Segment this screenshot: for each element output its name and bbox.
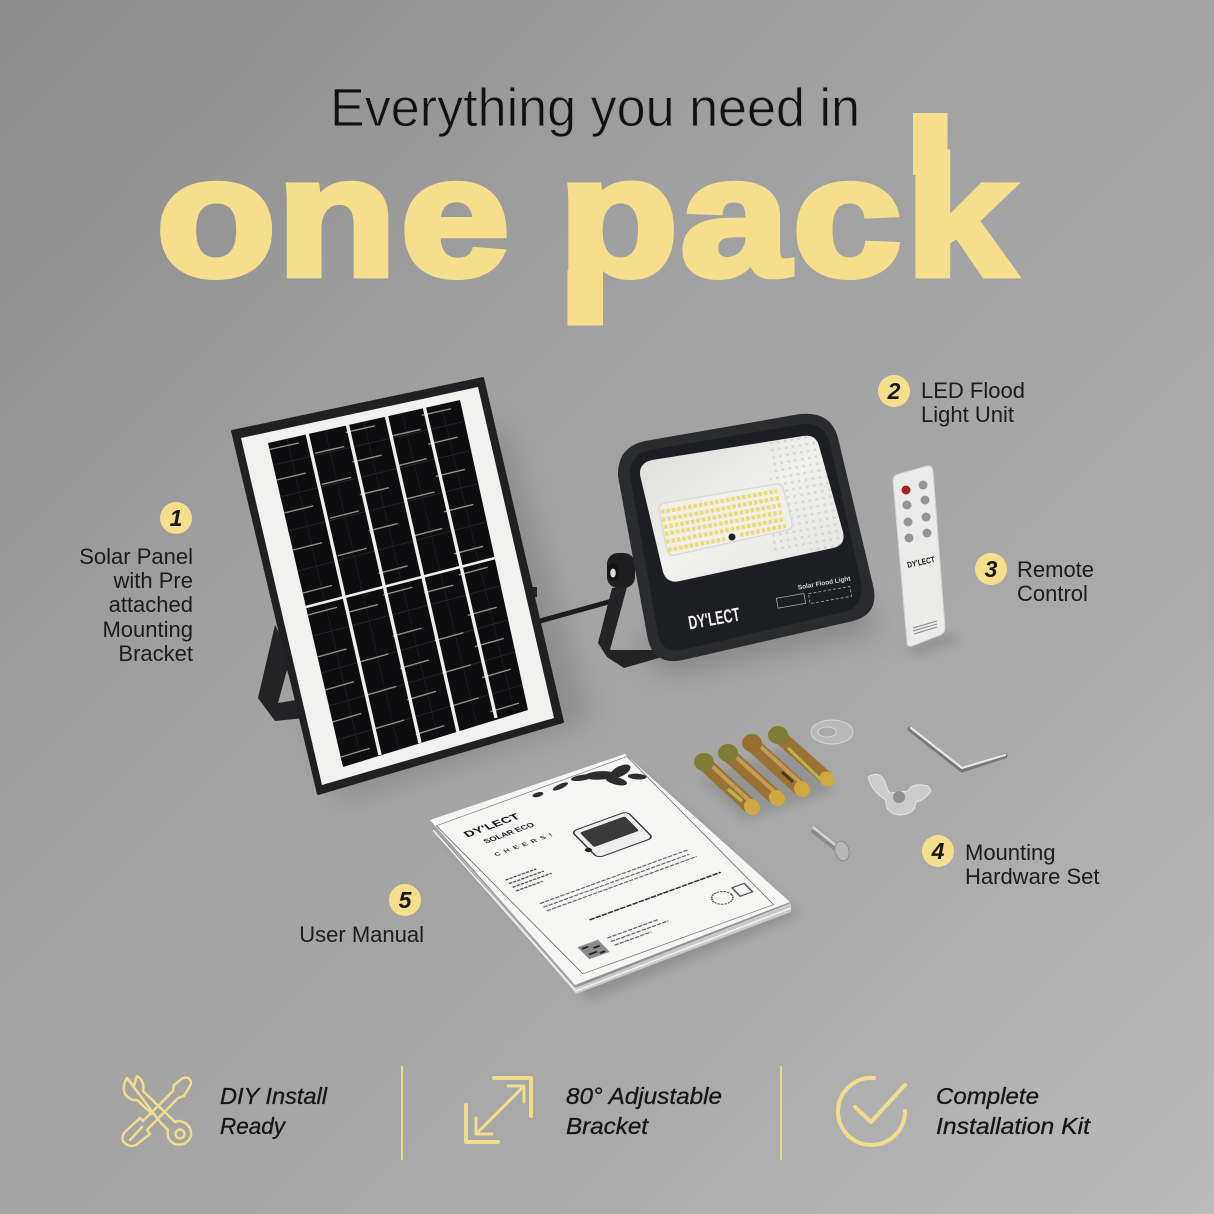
sensor [728,534,736,540]
expansion bolt 4 [768,726,838,790]
expansion bolt 3 [742,734,813,800]
hardware shadow [700,745,835,820]
k ascender [913,113,948,175]
wing nut [868,774,931,815]
flood light shadow [630,600,880,675]
reflector screen [640,436,844,582]
badge 1 [160,502,192,534]
badge 3: 3 [985,556,998,582]
expansion bolt 1 [694,753,763,818]
label text 1: Bracket [118,641,193,666]
title [156,78,1015,326]
brand logo: DY'LECT [687,605,742,634]
feature text: Bracket [566,1113,650,1139]
label 4: mounting hardware [922,835,1100,889]
feature: DIY install [122,1076,328,1146]
manual logo: DY'LECT [461,812,523,839]
reflector texture [770,436,844,550]
user manual [430,754,800,1000]
expansion bolt 2 [718,744,788,809]
mounting hardware [694,720,1005,862]
white column strips [307,406,496,755]
feature text [566,1083,722,1139]
divider [401,1066,403,1160]
label text 1: with Pre [113,568,193,593]
panel stand [258,625,304,721]
icon: diagonal arrows [466,1078,531,1142]
top page [430,754,790,985]
badge 5: 5 [399,887,413,913]
body [618,414,874,661]
p descender [568,270,603,326]
badge 1: 1 [170,505,182,531]
remote logo: DY'LECT [906,554,936,570]
buttons [902,480,932,542]
label text 3: Remote [1017,557,1094,582]
panel shadow [300,420,590,800]
fine grid lines [273,404,522,762]
label text 1: attached [109,592,193,617]
feature: complete kit [838,1078,1092,1145]
mounting bracket [598,587,662,668]
white backing [241,387,554,785]
feature text: Ready [220,1113,286,1139]
spec icons [776,586,852,608]
label text 2: LED Flood [921,378,1025,403]
label text 1: Solar Panel [79,544,193,569]
manual shadow [440,770,800,1000]
horizontal break [306,558,495,607]
badge 2 [878,375,910,407]
seals [708,883,754,907]
body bevel [630,424,862,651]
remote shadow [905,634,960,655]
solar panel [232,378,612,800]
badge 4 [922,835,954,867]
hex key [910,729,1005,770]
page content [436,756,775,974]
icon: check circle [838,1078,905,1145]
label text 2: Light Unit [921,402,1014,427]
LED rows [661,491,786,550]
label text 4: Hardware Set [965,864,1100,889]
flood light [598,414,880,675]
leaves [528,756,651,815]
icon: tools [122,1076,191,1146]
feature text [936,1083,1092,1139]
mini light illustration [568,811,653,859]
side clip [531,587,537,597]
feature: adjustable bracket [466,1078,722,1142]
divider [780,1066,782,1160]
paragraph copy [540,849,697,911]
feature text: Complete [936,1083,1039,1109]
bus bars [270,406,526,757]
page stack [430,822,791,994]
cheers: CHEERS! [493,831,558,858]
feature text: 80° Adjustable [566,1083,722,1109]
LED board [659,484,792,555]
label text 3: Control [1017,581,1088,606]
feature text [220,1083,328,1139]
badge 4: 4 [931,838,945,864]
bold note [589,872,721,920]
inner frame [436,757,774,974]
washer [811,720,853,744]
QR code [577,940,610,959]
badge 2: 2 [887,378,901,404]
adjustment knob [607,553,635,588]
remote fine print [913,621,937,634]
panel frame [232,378,563,794]
stack lines [433,830,791,991]
cable [540,601,612,621]
title line: Everything you need in: Everything you need in [330,78,860,138]
screw [813,827,851,862]
remote body [893,466,945,646]
label 2: LED flood light [878,375,1025,427]
label text 4: Mounting [965,840,1056,865]
manual subtitle: SOLAR ECO [481,821,537,845]
label 3: remote control [975,553,1094,606]
feature text: DIY Install [220,1083,328,1109]
remote control [893,466,960,655]
label 1: solar panel [79,502,193,666]
solar cells [268,400,528,767]
label text 1: Mounting [102,617,193,642]
feature text: Installation Kit [936,1113,1092,1139]
small copy [505,866,555,891]
product name: Solar Flood Light [797,575,852,592]
label 5: user manual [299,884,424,947]
title line: one pack: one pack [156,122,1015,311]
QR copy [607,917,672,945]
label text 5: User Manual [299,922,424,947]
